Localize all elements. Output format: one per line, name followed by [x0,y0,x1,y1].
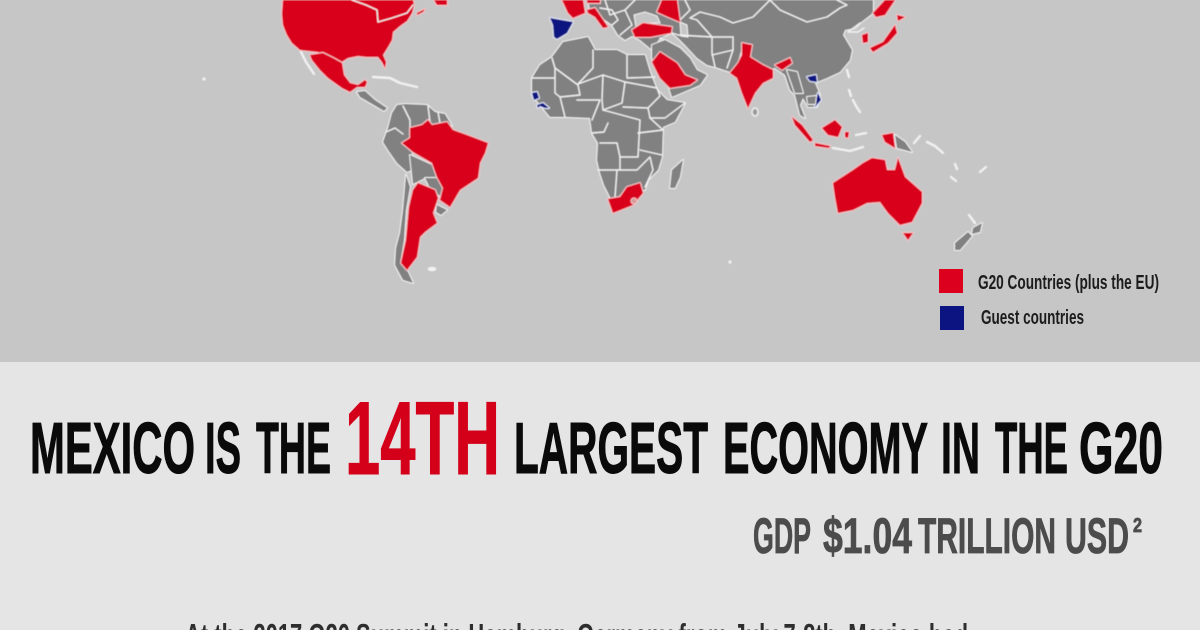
map: South America [383,104,488,283]
headline: ECONOMY [723,409,928,489]
map: North America [203,0,447,111]
headline: IS [205,409,241,489]
legend: guest countries: Guest countries [981,307,1084,329]
headline: IN [941,409,980,489]
headline: THE [995,409,1068,489]
GDP figure [753,508,1142,564]
panel: world map [0,0,1200,362]
GDP figure: GDP [753,508,811,564]
headline: MEXICO [30,409,195,489]
headline: THE [256,409,331,489]
legend: guest countries [940,306,1084,330]
GDP figure: TRILLION [918,508,1056,564]
map: Eurasia [550,0,905,118]
headline: 14TH highlight: 14TH [345,381,500,497]
legend [939,269,1159,330]
map: Southeast Asia and Oceania [729,70,986,263]
headline [30,381,1163,497]
GDP figure: $1.04 [823,508,912,564]
GDP figure: USD [1065,508,1129,564]
map: Africa [532,37,685,213]
GDP figure: 2 [1133,515,1142,537]
legend: G20 countries [939,269,1159,294]
headline: LARGEST [514,409,708,489]
